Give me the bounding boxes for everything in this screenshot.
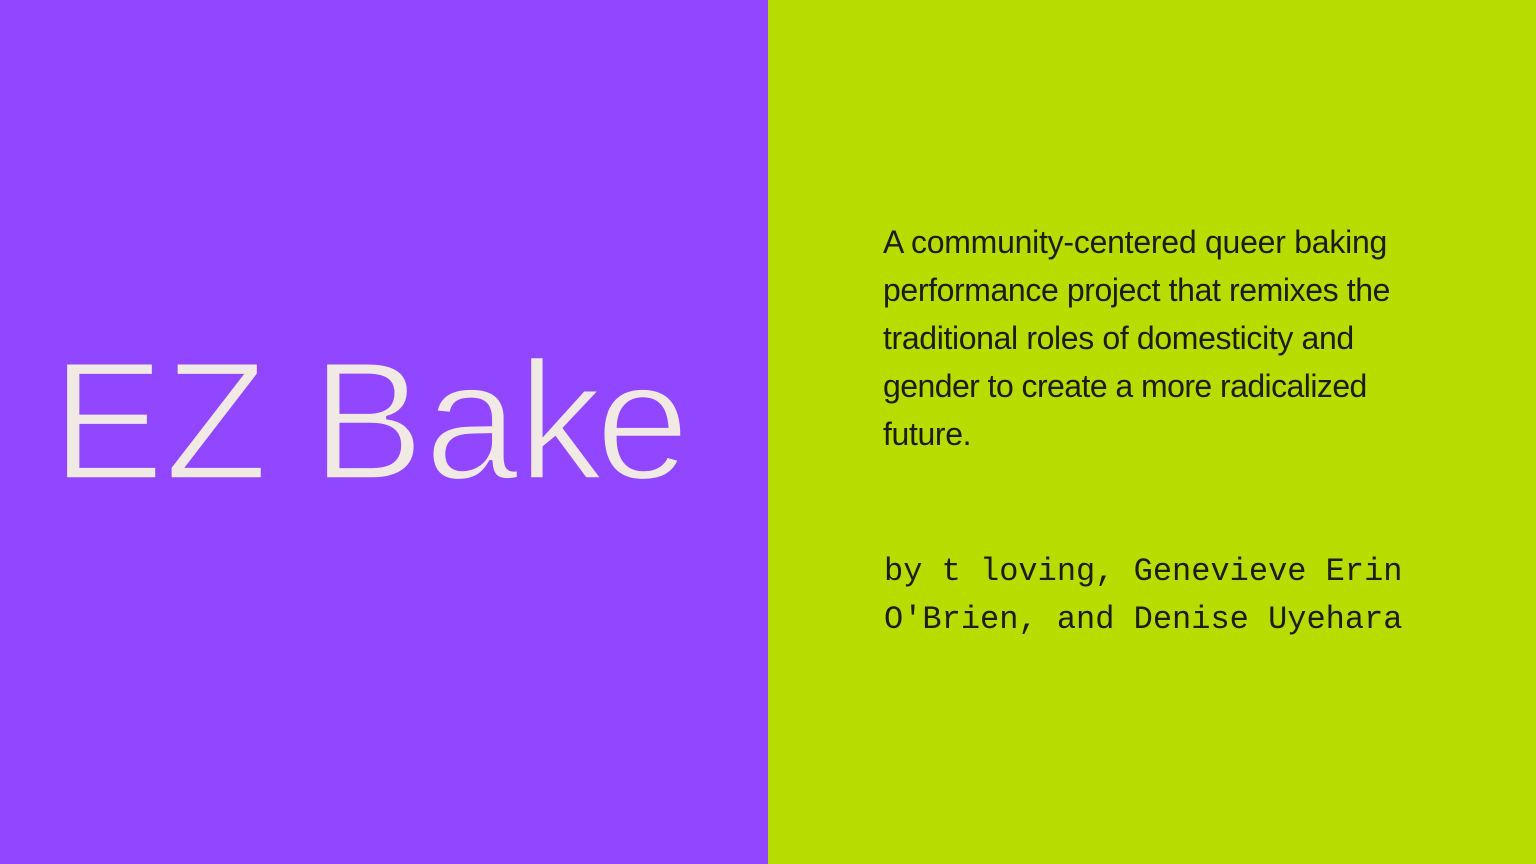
text block: project description: traditional roles of domesticity and (883, 320, 1354, 356)
panel: purple title side (0, 0, 768, 864)
panel: green description side (768, 0, 1536, 864)
text block: project description: gender to create a more radicalized (883, 368, 1367, 404)
text block: authors: O'Brien, and Denise Uyehara (884, 601, 1402, 638)
text block: project description: future. (883, 416, 971, 452)
text block: project description: A community-centered queer baking (883, 224, 1387, 260)
text block: project description: performance project that remixes the (883, 272, 1390, 308)
text block: authors: by t loving, Genevieve Erin (884, 553, 1402, 590)
title: EZ Bake (52, 326, 690, 515)
